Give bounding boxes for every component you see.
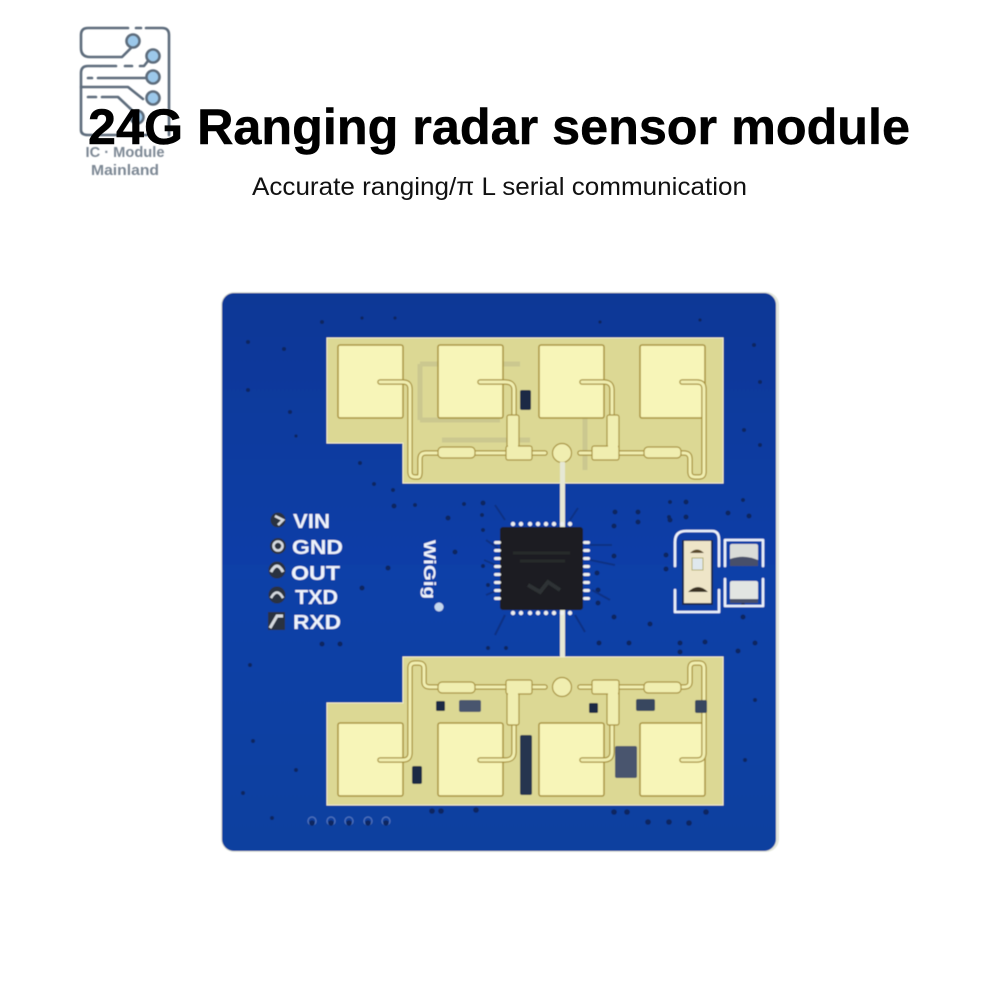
pin labels: GND xyxy=(292,536,343,559)
pin labels: VIN xyxy=(293,510,330,533)
pin labels: RXD xyxy=(293,611,341,634)
WiGig silkscreen: WiGig xyxy=(420,540,439,599)
pin labels: TXD xyxy=(295,586,338,609)
radar chip xyxy=(484,505,615,635)
pin labels: OUT xyxy=(291,562,341,585)
feed lines to chip xyxy=(560,462,565,528)
pin labels xyxy=(268,510,343,634)
top antenna array xyxy=(327,338,723,483)
logo: IC Module Mainland: IC · Module xyxy=(86,145,164,161)
LED and pads xyxy=(675,531,763,612)
subtitle: Accurate ranging/π L serial communication xyxy=(252,173,747,201)
PCB radar module xyxy=(221,292,779,852)
vias xyxy=(241,316,762,826)
logo: IC Module Mainland xyxy=(81,28,169,179)
bottom antenna array xyxy=(327,657,723,805)
board xyxy=(221,292,779,852)
logo: IC Module Mainland: Mainland xyxy=(91,163,159,179)
title: 24G Ranging radar sensor module xyxy=(88,99,910,155)
watermark overlay xyxy=(420,364,585,470)
WiGig silkscreen xyxy=(420,540,444,612)
